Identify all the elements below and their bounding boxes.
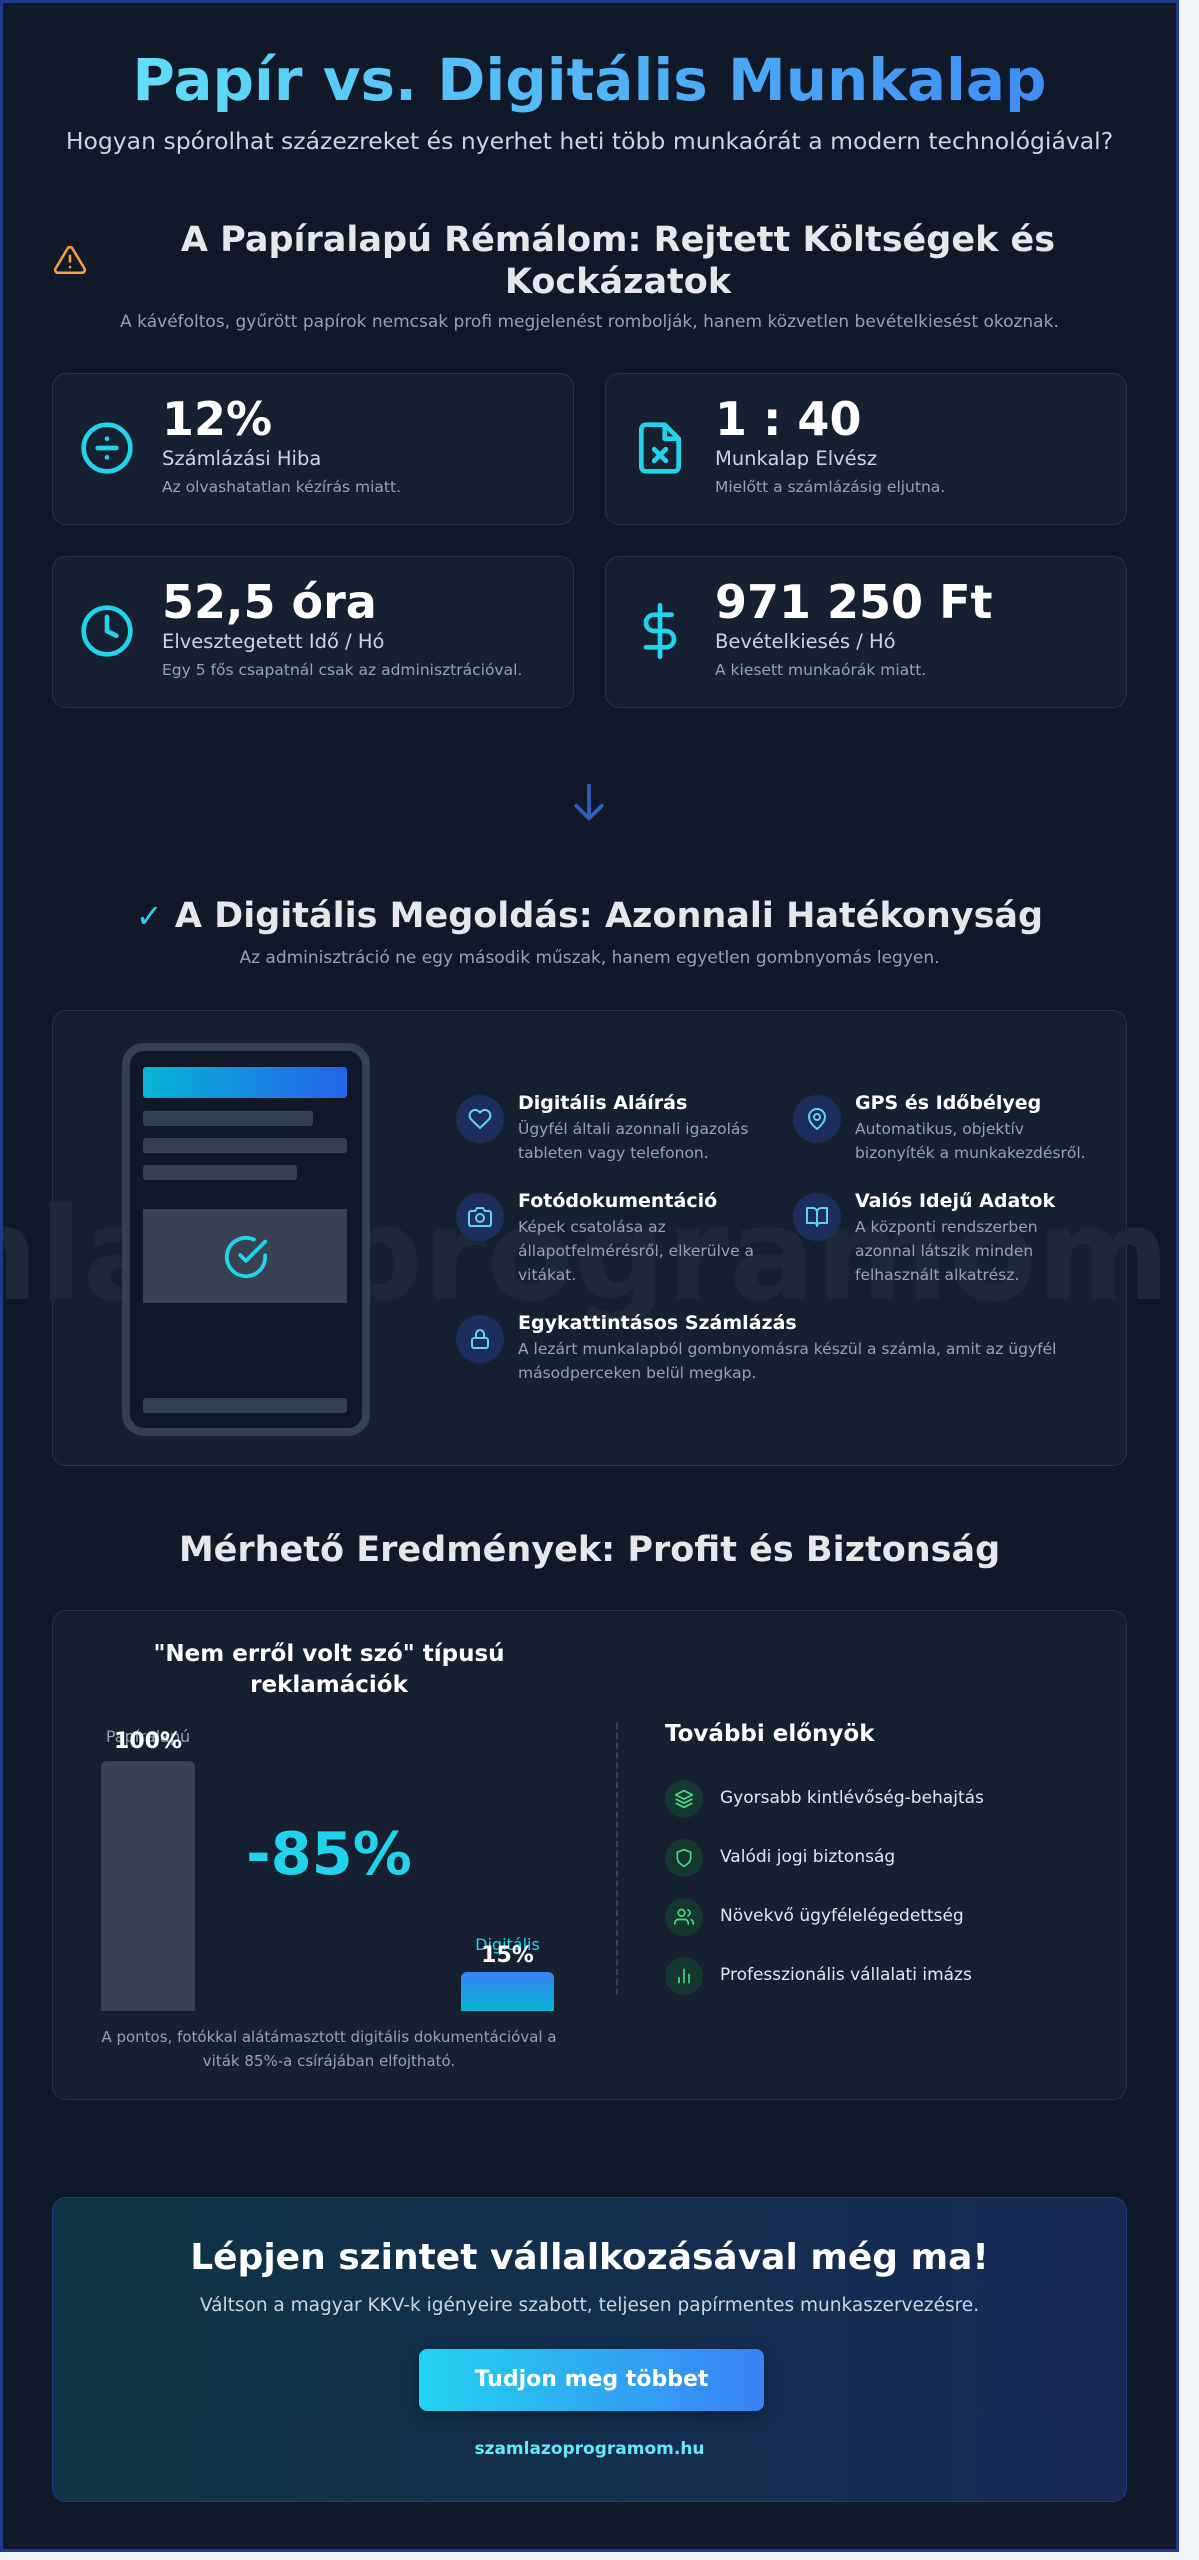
heading: digital solution: ✓ A Digitális Megoldás: Azonnali Hatékonyság [136,896,1043,936]
icon: warning [54,246,86,274]
benefit: satisfaction: Növekvő ügyfélelégedettség [720,1906,964,1926]
heading: results: Mérhető Eredmények: Profit és Biztonság [179,1530,1000,1570]
card: lost worksheet: Munkalap Elvész [715,447,877,470]
button [419,2349,764,2411]
feature: gps: GPS és Időbélyeg [855,1092,1041,1114]
card: lost worksheet: Mielőtt a számlázásig eljutna. [715,478,945,496]
chart title: "Nem erről volt szó" típusú reklamációk [153,1641,505,1698]
heading: paper nightmare: Kockázatok [505,262,731,302]
feature: signature [456,1092,748,1162]
cta title: Lépjen szintet vállalkozásával még ma! [190,2237,989,2278]
benefit: faster collection [665,1780,984,1818]
feature: gps: Automatikus, objektív bizonyíték a munkakezdésről. [855,1120,1086,1162]
button: Tudjon meg többet [475,2367,708,2392]
arrow: down [574,784,604,820]
benefit: professional image [665,1957,972,1995]
panel: results [52,1610,1127,2100]
card: billing error: Számlázási Hiba [162,447,321,470]
icon: file x [639,422,681,474]
card: wasted time [52,556,574,708]
benefit: professional image: Professzionális vállalati imázs [720,1965,972,1985]
subheading: paper nightmare: A kávéfoltos, gyűrött papírok nemcsak profi megjelenést rombolják, hanem közvetlen bevételkiesést okoznak. [120,312,1059,332]
card: revenue loss: 971 250 Ft [715,575,992,629]
card: revenue loss: A kiesett munkaórák miatt. [715,661,926,679]
card: revenue loss [605,556,1127,708]
card: billing error: Az olvashatatlan kézírás miatt. [162,478,401,496]
benefits heading: További előnyök [665,1721,875,1747]
heading: paper nightmare [181,220,1055,302]
bar chart: Papíralapú [106,1727,190,1746]
feature: photo [456,1190,754,1284]
card: wasted time: 52,5 óra [162,575,377,629]
card: wasted time: Elvesztegetett Idő / Hó [162,630,384,653]
feature: signature: Digitális Aláírás [518,1092,687,1114]
subheading: digital solution: Az adminisztráció ne egy második műszak, hanem egyetlen gombnyomás legyen. [239,948,940,968]
card: billing error: 12% [162,392,272,446]
benefit: legal security [665,1839,895,1877]
benefit: satisfaction [665,1898,964,1936]
benefit: legal security: Valódi jogi biztonság [720,1847,895,1867]
feature: realtime data: Valós Idejű Adatok [855,1190,1055,1212]
icon: clock [81,605,133,657]
panel: call to action [52,2197,1127,2502]
card: lost worksheet: 1 : 40 [715,392,861,446]
big stat: -85% [246,1819,412,1888]
feature: one-click billing: A lezárt munkalapból gombnyomásra készül a számla, amit az ügyfél másodperceken belül megkap. [518,1340,1056,1382]
bar chart: 15% [481,1943,534,1968]
website link: szamlazoprogramom.hu [474,2439,705,2459]
card: wasted time: Egy 5 fős csapatnál csak az adminisztrációval. [162,661,522,679]
chart caption: A pontos, fotókkal alátámasztott digitális dokumentációval a viták 85%-a csírájában elfojtható. [101,2028,557,2070]
card: revenue loss: Bevételkiesés / Hó [715,630,896,653]
icon: divide circle [81,422,133,474]
feature: realtime data [793,1190,1056,1284]
card: billing error [52,373,574,525]
icon: check circle [224,1236,268,1278]
subtitle: Hogyan spórolhat százezreket és nyerhet heti több munkaórát a modern technológiával? [66,127,1113,155]
bar chart [101,1727,554,2011]
heading: paper nightmare: A Papíralapú Rémálom: Rejtett Költségek és [181,220,1055,260]
feature: signature: Ügyfél általi azonnali igazolás tableten vagy telefonon. [518,1120,748,1162]
feature: realtime data: A központi rendszerben azonnal látszik minden felhasznált alkatrész. [855,1218,1038,1284]
bar chart: 100% [114,1729,182,1754]
icon: dollar [644,603,676,659]
feature: gps [793,1092,1086,1162]
feature: photo: Fotódokumentáció [518,1190,717,1212]
bar chart: Digitális [475,1935,540,1954]
feature: one-click billing [456,1312,1056,1382]
card: lost worksheet [605,373,1127,525]
feature: photo: Képek csatolása az állapotfelmérésről, elkerülve a vitákat. [518,1218,754,1284]
feature: one-click billing: Egykattintásos Számlázás [518,1312,797,1334]
benefit: faster collection: Gyorsabb kintlévőség-behajtás [720,1788,984,1808]
phone mockup [122,1043,370,1436]
panel: digital features [52,1010,1127,1466]
cta subtitle: Váltson a magyar KKV-k igényeire szabott, teljesen papírmentes munkaszervezésre. [200,2295,979,2316]
